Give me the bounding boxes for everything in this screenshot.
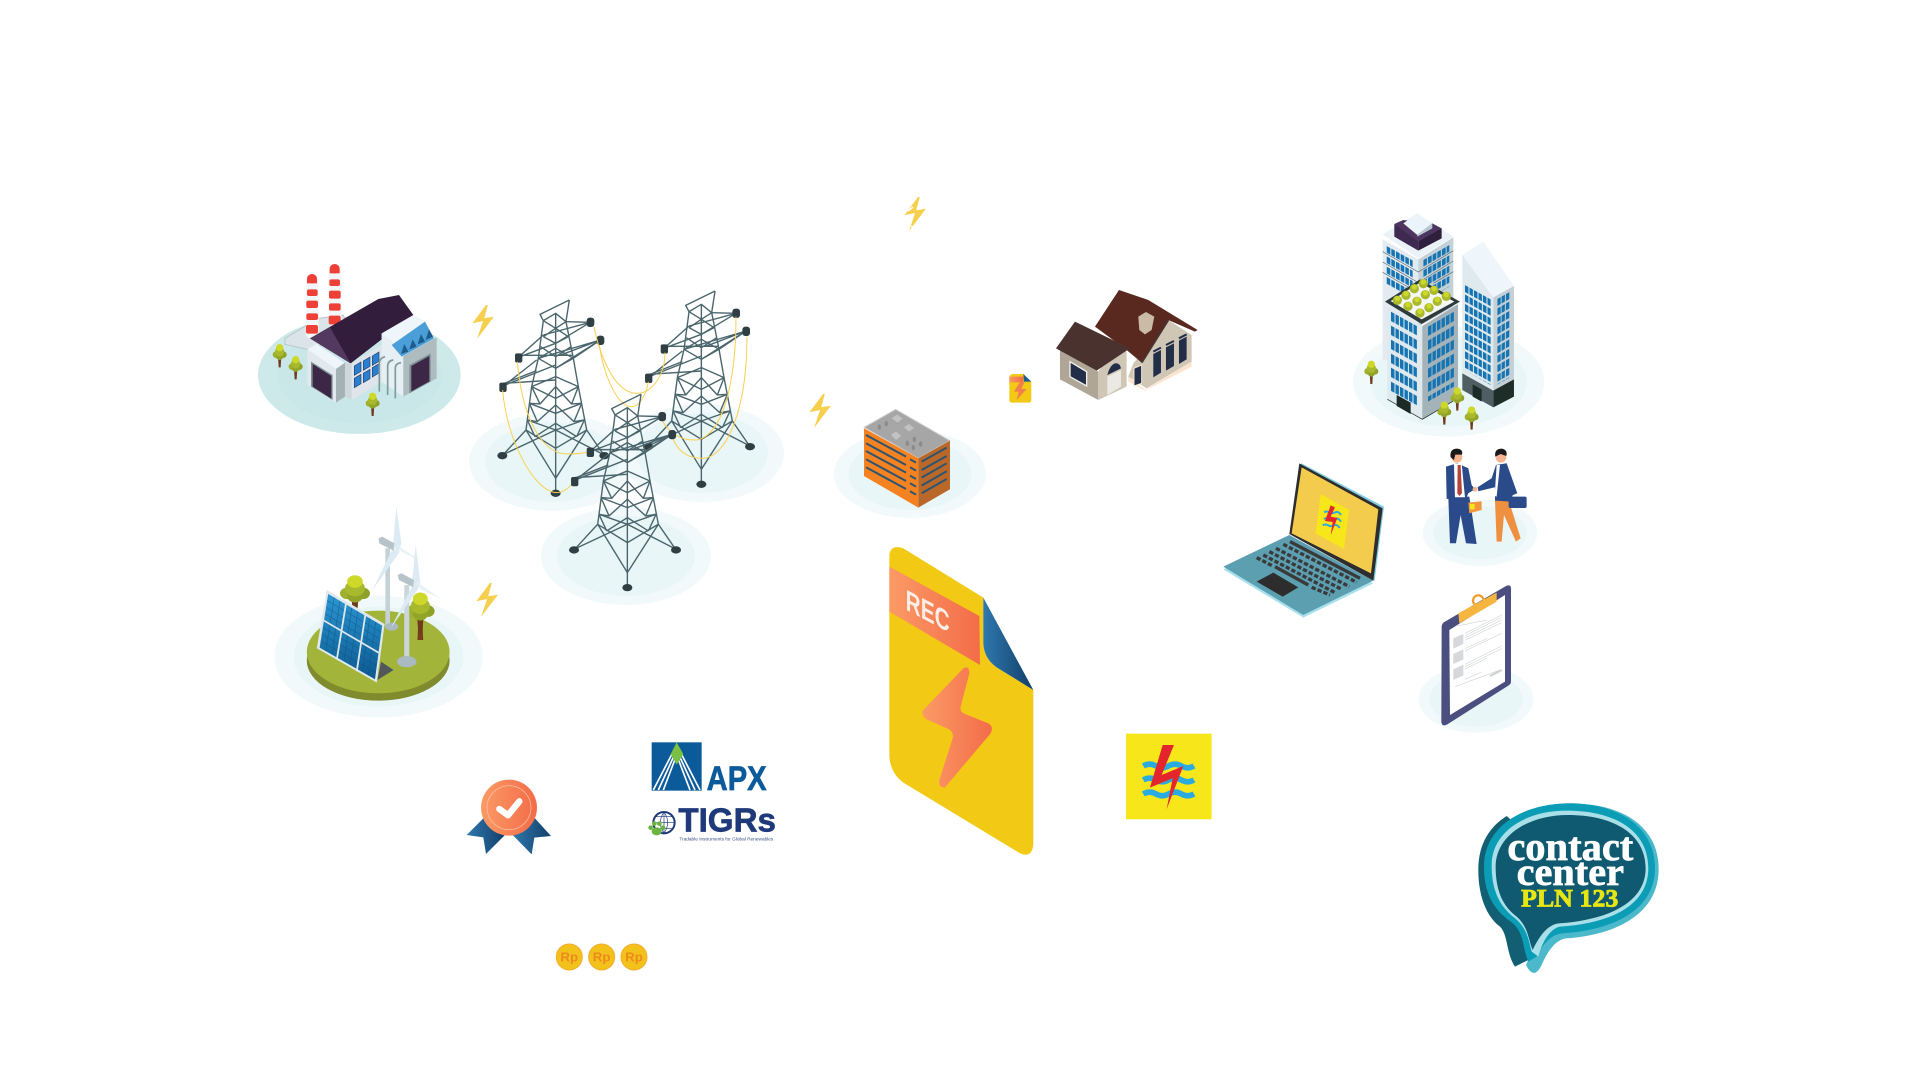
contact center speech bubble	[1478, 803, 1659, 973]
office buildings	[1353, 213, 1544, 437]
bubble text: contact	[1507, 824, 1634, 869]
solar panel	[317, 590, 394, 683]
wind and solar farm	[274, 507, 483, 718]
REC label band: REC	[906, 583, 950, 639]
bubble text: center	[1517, 852, 1624, 894]
transmission tower left	[497, 300, 609, 497]
yellow power cables	[503, 317, 747, 493]
document fold	[983, 598, 1033, 690]
lightning emblem	[923, 667, 992, 787]
coal building with orange walls	[834, 409, 986, 518]
laptop	[1223, 463, 1384, 618]
TIGRs logo: Tradable Instruments for Global Renewables	[679, 836, 774, 841]
plant and tower group	[258, 197, 926, 617]
bubble text: PLN 123	[1521, 885, 1618, 913]
tower ground shadows	[469, 404, 784, 605]
coin: Rp	[593, 950, 611, 965]
two businessmen shaking hands	[1423, 449, 1537, 566]
house	[1056, 290, 1198, 400]
certified badge	[467, 780, 551, 854]
bubble text	[1507, 824, 1634, 913]
transmission tower front	[569, 394, 681, 591]
coin: Rp	[560, 950, 578, 965]
transmission tower right	[643, 291, 755, 488]
lightning bolt	[472, 305, 494, 339]
clipboard	[1418, 585, 1534, 733]
REC label band	[889, 567, 980, 665]
lightning bolt	[476, 583, 498, 617]
rupiah coins	[556, 944, 647, 970]
TIGRs logo: TIGRs	[678, 803, 776, 840]
REC certificate document	[889, 547, 1033, 855]
lightning bolt	[809, 394, 831, 428]
coin: Rp	[625, 950, 643, 965]
PLN logo	[1126, 734, 1212, 819]
small certificate icon	[1009, 374, 1031, 403]
APX logo	[652, 742, 767, 798]
lightning bolt	[904, 197, 926, 231]
APX logo: APX	[707, 760, 767, 798]
power plant	[258, 264, 461, 434]
